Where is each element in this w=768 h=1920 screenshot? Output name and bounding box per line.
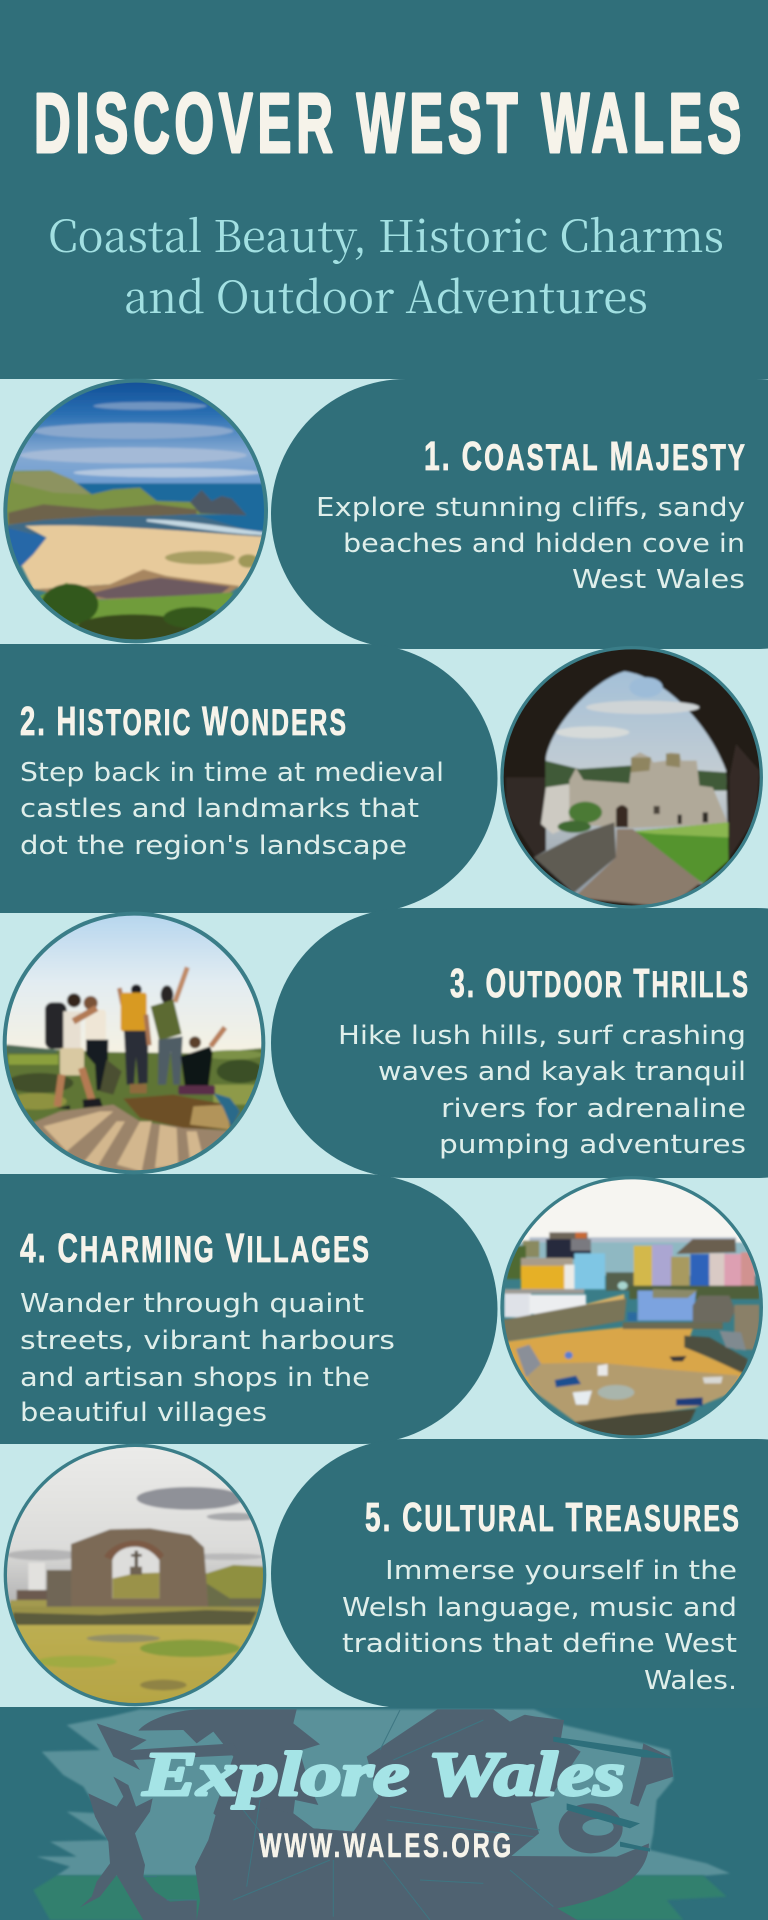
text 1: beaches and hidden cove in <box>343 529 745 559</box>
photo: ruined arch <box>0 1440 272 1712</box>
footer panel <box>0 1707 768 1920</box>
hiker third <box>119 988 123 1005</box>
text 1: West Wales <box>572 565 745 595</box>
text 2: Step back in time at medieval <box>20 758 444 788</box>
text 1: Explore stunning cliffs, sandy <box>316 493 745 523</box>
subtitle: Coastal Beauty, Historic Charms <box>48 201 724 265</box>
photo: castle through arch <box>496 644 768 916</box>
hiker seated <box>211 1027 225 1046</box>
panel: 2 historic wonders <box>0 644 498 913</box>
light background band <box>0 379 768 1707</box>
subtitle: and Outdoor Adventures <box>124 262 648 326</box>
panel: 5 cultural treasures <box>271 1439 768 1708</box>
text 3: waves and kayak tranquil <box>378 1057 746 1087</box>
text 4: beautiful villages <box>20 1398 267 1428</box>
panel: 1 coastal majesty <box>271 379 768 649</box>
text 1 <box>316 493 745 595</box>
teal brush strokes over the tail <box>553 1737 673 1852</box>
text 2: castles and landmarks that <box>20 794 419 824</box>
text 5: Welsh language, music and <box>342 1593 737 1623</box>
text 3 <box>338 1021 746 1160</box>
text 5 <box>342 1556 737 1696</box>
heading 4: 4. CHARMING VILLAGES <box>20 1225 371 1271</box>
text 3: pumping adventures <box>439 1130 746 1160</box>
text 3: Hike lush hills, surf crashing <box>338 1021 746 1051</box>
text 2: dot the region's landscape <box>20 831 407 861</box>
hiker second <box>85 1010 106 1040</box>
header panel <box>0 0 768 379</box>
hiker fourth <box>175 967 187 1002</box>
text 4: and artisan shops in the <box>20 1363 370 1393</box>
photo: coastal beach <box>0 376 272 643</box>
dragon outline details <box>143 1710 553 1920</box>
text 2 <box>20 758 444 861</box>
text 5: traditions that define West <box>342 1629 737 1659</box>
heading 2: 2. HISTORIC WONDERS <box>20 698 348 744</box>
text 5: Immerse yourself in the <box>385 1556 737 1586</box>
subtitle <box>48 201 724 326</box>
text 4: Wander through quaint <box>20 1289 364 1319</box>
hiker left <box>45 1002 67 1049</box>
text 5: Wales. <box>644 1666 737 1696</box>
flag green stripe <box>33 1876 727 1920</box>
website address: WWW.WALES.ORG <box>259 1827 514 1865</box>
panel: 3 outdoor thrills <box>271 908 768 1178</box>
explore wales heading: Explore Wales <box>142 1741 625 1809</box>
text 4 <box>20 1289 395 1428</box>
flag and dragon artwork <box>33 1709 730 1920</box>
dragon <box>80 1709 673 1920</box>
flag white stripe <box>37 1709 730 1876</box>
text 3: rivers for adrenaline <box>441 1094 746 1124</box>
text 4: streets, vibrant harbours <box>20 1326 395 1356</box>
photo: harbour village <box>496 1174 768 1439</box>
photo: hikers on rock <box>0 908 272 1175</box>
panel: 4 charming villages <box>0 1174 498 1444</box>
